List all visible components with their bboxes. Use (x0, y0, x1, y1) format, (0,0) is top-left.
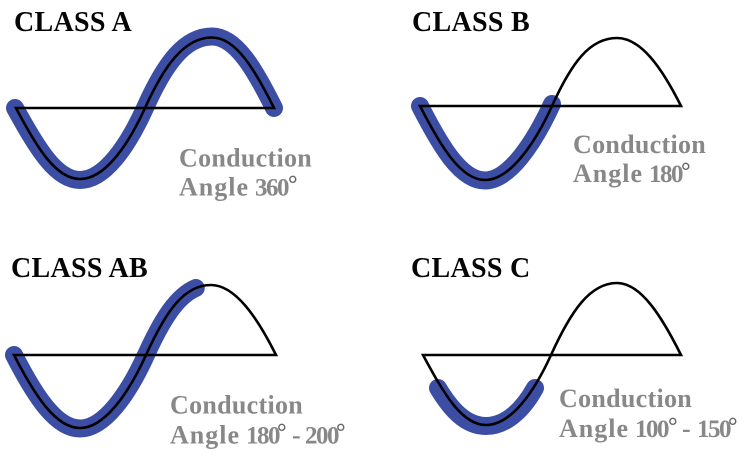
angle A: ° (288, 172, 298, 198)
heading: class AB: CLASS AB (11, 253, 148, 284)
angle AB: 180 (246, 422, 280, 450)
angle AB: Angle (170, 420, 248, 450)
conduction highlight B (420, 104, 552, 180)
panel: class AB (11, 253, 346, 450)
angle C: Angle (559, 414, 636, 443)
angle B: Angle (573, 159, 650, 188)
angle A: Angle (179, 172, 256, 202)
label AB: Conduction (170, 390, 303, 420)
waveform B (420, 38, 681, 180)
angle C: - (682, 414, 691, 443)
angle AB: 200 (305, 422, 339, 450)
angle C: 150 (697, 416, 731, 443)
conduction highlight A (15, 36, 274, 180)
angle AB: ° (336, 420, 346, 446)
angle C: ° (668, 414, 678, 440)
heading: class C: CLASS C (411, 253, 531, 284)
waveform C (423, 283, 681, 425)
panel: class C (411, 253, 738, 443)
angle B: 180 (649, 161, 683, 188)
angle AB: ° (277, 420, 287, 446)
conduction highlight C (438, 388, 535, 426)
label B: Conduction (573, 130, 706, 159)
panel: class B (412, 7, 706, 188)
angle B: ° (681, 159, 691, 185)
angle AB: - (292, 420, 301, 450)
conduction highlight AB (14, 288, 196, 428)
label A: Conduction (179, 144, 312, 172)
angle C: ° (728, 414, 738, 440)
label C: Conduction (559, 384, 692, 413)
waveform A (16, 38, 274, 179)
waveform AB (14, 285, 276, 428)
angle C: 100 (635, 416, 669, 443)
angle A: 360 (255, 174, 289, 202)
panel: class A (14, 7, 312, 202)
heading: class A: CLASS A (14, 7, 133, 38)
heading: class B: CLASS B (412, 7, 530, 38)
